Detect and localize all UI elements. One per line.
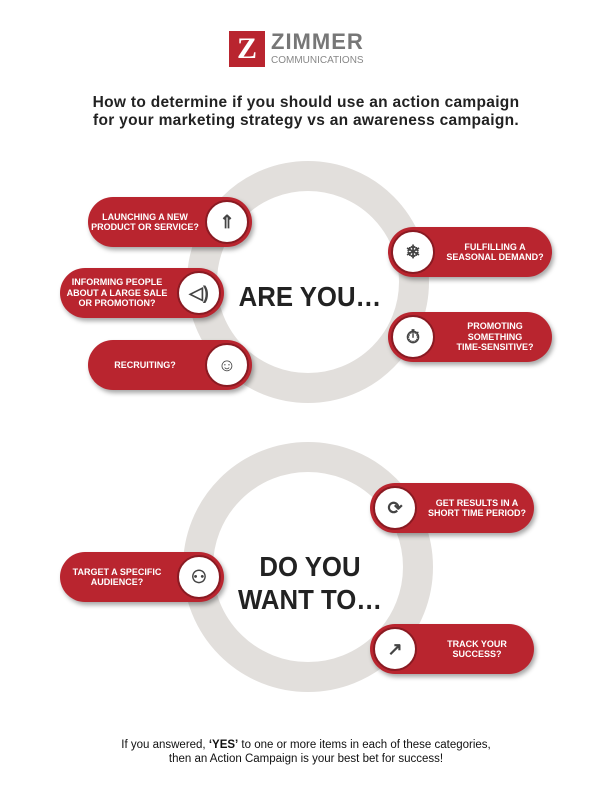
pill: results <box>370 483 534 533</box>
logo: COMMUNICATIONS <box>271 55 364 66</box>
logo: ZIMMER <box>271 29 364 54</box>
title: How to determine if you should use an action campaign <box>93 94 519 111</box>
pill: time-sensitive: PROMOTING <box>467 321 523 331</box>
pill: recruiting <box>88 340 252 390</box>
pill: launching: LAUNCHING A NEW <box>102 212 188 222</box>
pill: seasonal: FULFILLING A <box>464 242 526 252</box>
pill: target <box>60 552 224 602</box>
pill: informing <box>60 268 224 318</box>
pill: target: ⚇ <box>191 567 207 587</box>
pill: seasonal: ❄ <box>405 242 421 262</box>
logo: Z <box>237 32 257 65</box>
title: for your marketing strategy vs an awareness campaign. <box>93 112 519 129</box>
pill: seasonal <box>388 227 552 277</box>
pill: time-sensitive: TIME-SENSITIVE? <box>456 342 534 352</box>
heading: do you want to: DO YOU <box>259 551 361 582</box>
heading: are you: ARE YOU… <box>239 281 381 312</box>
pill: time-sensitive: SOMETHING <box>468 332 522 342</box>
pill: track: TRACK YOUR <box>447 638 507 648</box>
pill: time-sensitive <box>388 312 552 362</box>
title <box>93 94 519 129</box>
pill: target: AUDIENCE? <box>91 577 143 587</box>
footer text <box>121 739 491 765</box>
pill: time-sensitive: ⏱ <box>406 327 420 347</box>
pill: track <box>370 624 534 674</box>
pill: informing: INFORMING PEOPLE <box>72 277 162 287</box>
pill: track: SUCCESS? <box>452 649 502 659</box>
pill: launching <box>88 197 252 247</box>
pill: target: TARGET A SPECIFIC <box>73 566 161 576</box>
heading: do you want to <box>238 551 382 615</box>
logo <box>229 29 364 67</box>
pill: recruiting: ☺ <box>218 355 236 375</box>
pill: seasonal: SEASONAL DEMAND? <box>446 252 544 262</box>
heading: do you want to: WANT TO… <box>238 584 382 615</box>
pill: launching: PRODUCT OR SERVICE? <box>91 222 199 232</box>
pill: informing: OR PROMOTION? <box>78 298 156 308</box>
pill: recruiting: RECRUITING? <box>114 360 176 370</box>
pill: results: ⟳ <box>387 498 403 518</box>
pill: results: GET RESULTS IN A <box>436 498 518 508</box>
pill: informing: ABOUT A LARGE SALE <box>67 288 167 298</box>
pill: launching: ⇑ <box>219 212 235 232</box>
pill: results: SHORT TIME PERIOD? <box>428 508 526 518</box>
pill: track: ↗ <box>387 639 403 659</box>
footer text: If you answered, ‘YES’ to one or more items in each of these categories, <box>121 739 491 751</box>
footer text: then an Action Campaign is your best bet for success! <box>169 753 443 765</box>
pill: informing: ◁) <box>189 283 209 303</box>
